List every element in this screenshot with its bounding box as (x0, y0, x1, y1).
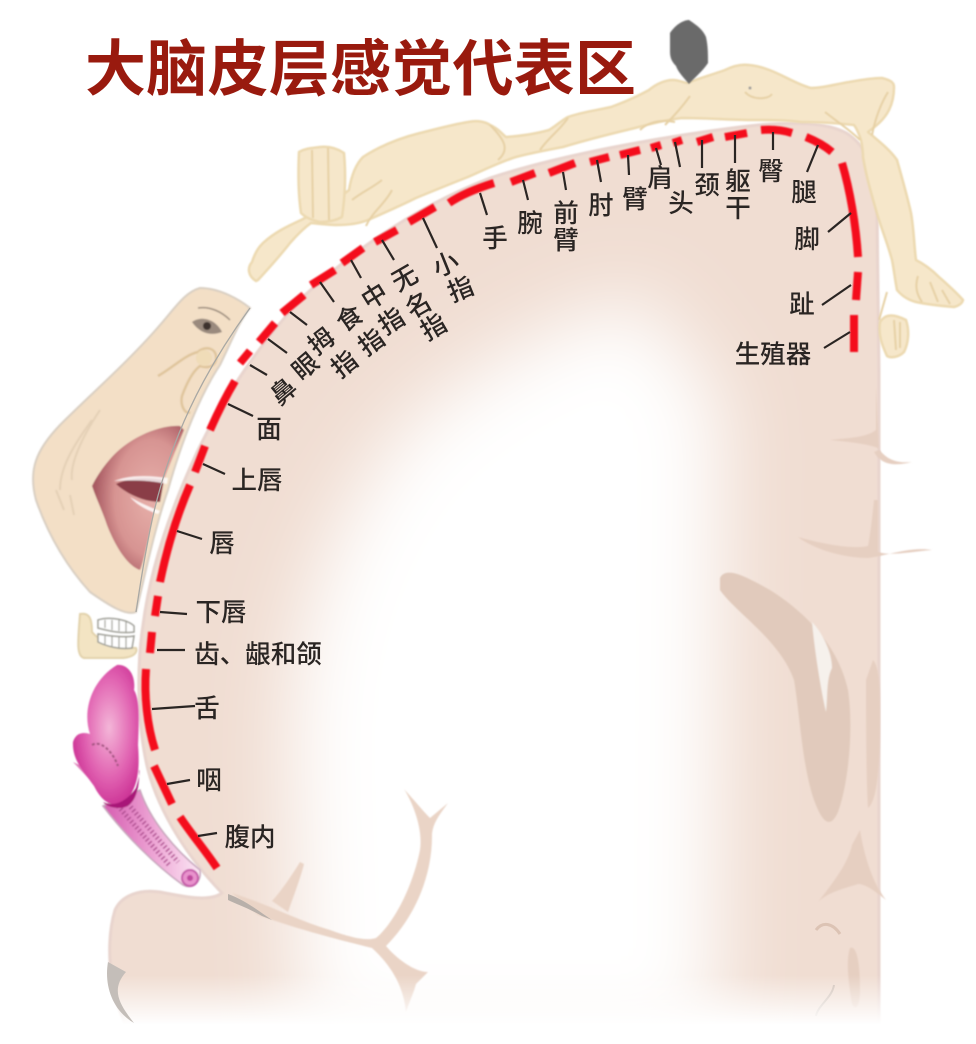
head (670, 20, 708, 84)
labels: top row: 手 (482, 225, 508, 253)
labels: top row: 颈 (694, 172, 720, 200)
sulci right (798, 386, 932, 1007)
labels: top row (482, 158, 820, 369)
labels: fingers and eye nose (rotated): 眼 (287, 348, 325, 386)
temporal lobe notch (107, 962, 134, 1023)
labels: fingers and eye nose (rotated): 中 (357, 278, 393, 316)
labels: top row: 躯 (725, 168, 751, 196)
labels: left column: 腹内 (224, 824, 276, 852)
leader lines (152, 132, 851, 836)
white matter fade (290, 295, 722, 1044)
labels: top row: 干 (725, 195, 751, 223)
homunculus body (249, 65, 963, 357)
lips (92, 426, 184, 570)
labels: top row: 肩 (647, 165, 673, 193)
genitals (879, 316, 908, 357)
nipple (748, 86, 752, 90)
face (33, 288, 250, 613)
labels: fingers and eye nose (rotated): 名 (401, 287, 437, 325)
sulci left (232, 789, 448, 1012)
labels: fingers and eye nose (rotated): 指 (326, 346, 364, 384)
labels: fingers and eye nose (rotated): 拇 (303, 323, 341, 361)
labels: left column: 面 (256, 416, 282, 444)
labels: fingers and eye nose (rotated): 指 (444, 272, 478, 308)
fingers (298, 147, 345, 222)
eye (192, 319, 222, 334)
labels: left column: 舌 (194, 695, 220, 723)
teeth and gums (78, 614, 136, 658)
bottom fade (90, 975, 900, 1025)
labels: top row: 腿 (791, 179, 817, 207)
brain cortex section (110, 123, 879, 1040)
labels: left column: 咽 (196, 767, 222, 795)
labels: left column: 上唇 (231, 467, 283, 495)
labels: top row: 脚 (794, 226, 820, 254)
labels: left column (194, 416, 322, 852)
labels: left column: 下唇 (195, 599, 247, 627)
torso, arm and leg (249, 65, 963, 307)
caudate nucleus (720, 573, 850, 822)
white edge (136, 308, 250, 612)
labels: fingers and eye nose (rotated): 鼻 (265, 373, 303, 411)
red representation band (145, 130, 858, 868)
labels: top row: 头 (668, 190, 694, 218)
labels: left column: 齿、龈和颌 (194, 641, 322, 669)
labels: fingers and eye nose (rotated): 无 (387, 260, 423, 298)
labels: top row: 前 (553, 200, 579, 228)
labels: top row: 趾 (789, 291, 815, 319)
labels: fingers and eye nose (rotated) (265, 247, 478, 411)
labels: fingers and eye nose (rotated): 指 (354, 324, 390, 362)
labels: left column: 唇 (209, 530, 235, 558)
labels: fingers and eye nose (rotated): 指 (416, 309, 452, 347)
labels: top row: 肘 (588, 192, 614, 220)
labels: fingers and eye nose (rotated): 小 (429, 247, 463, 283)
labels: top row: 臂 (553, 227, 579, 255)
nose (158, 348, 216, 413)
labels: top row: 生殖器 (735, 341, 811, 369)
labels: top row: 腕 (517, 210, 543, 238)
grey sulcus edge (228, 894, 272, 920)
labels: top row: 臂 (622, 186, 648, 214)
tongue and pharynx (73, 665, 200, 887)
wrinkles (56, 410, 100, 515)
title: 大脑皮层感觉代表区 (85, 35, 636, 103)
labels: fingers and eye nose (rotated): 指 (374, 303, 410, 341)
labels: fingers and eye nose (rotated): 食 (332, 300, 369, 338)
labels: top row: 臀 (758, 158, 784, 186)
